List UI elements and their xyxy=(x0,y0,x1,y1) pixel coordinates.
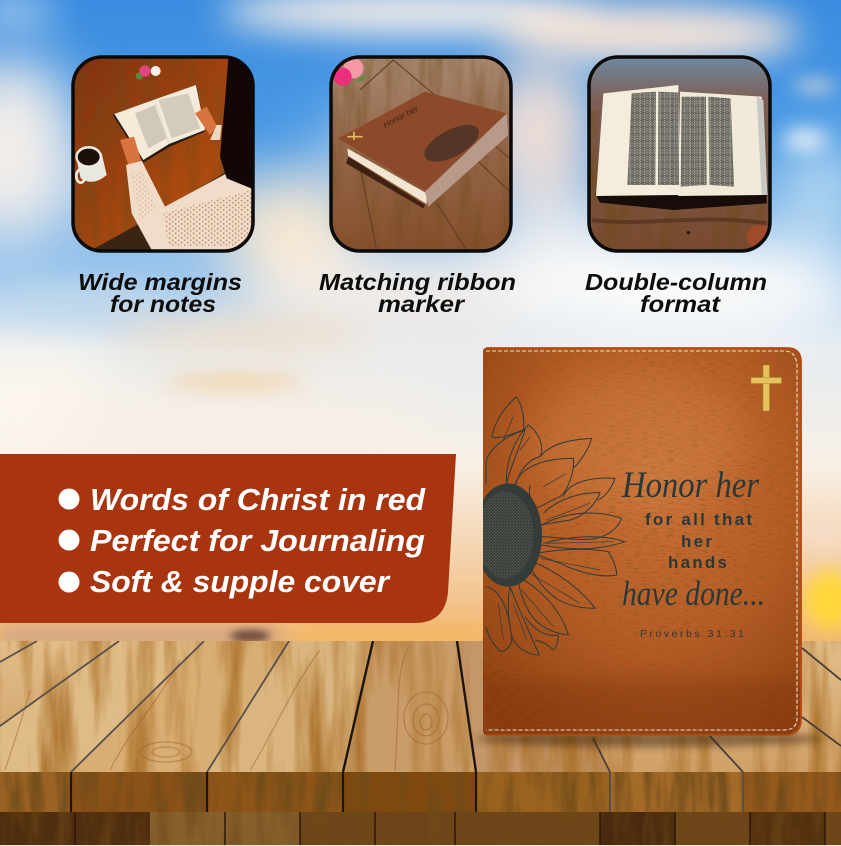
engraved verse: Honor her xyxy=(621,465,760,506)
photo: reading at table xyxy=(73,57,255,251)
icon: gold cross xyxy=(751,365,782,411)
bullet list: Words of Christ in red xyxy=(90,483,426,517)
text columns xyxy=(627,92,734,187)
wooden table xyxy=(0,641,841,845)
engraved verse: for all that xyxy=(645,510,752,529)
hair xyxy=(220,59,252,188)
book xyxy=(338,92,508,208)
engraved verse: hands xyxy=(668,553,727,572)
caption: matching ribbon xyxy=(319,269,516,317)
bullet list xyxy=(58,483,426,599)
sunflower engraving xyxy=(474,397,625,655)
flowers xyxy=(334,58,366,86)
photo: closed book on wood xyxy=(331,57,512,251)
bible cover xyxy=(474,348,801,740)
caption: matching ribbon: marker xyxy=(378,291,465,317)
caption: wide margins: Wide margins xyxy=(78,269,242,295)
caption: matching ribbon: Matching ribbon xyxy=(319,269,516,295)
photo: open double-column bible xyxy=(589,57,773,251)
bullet list: Soft & supple cover xyxy=(90,565,391,599)
engraved verse: Proverbs 31:31 xyxy=(640,628,744,640)
book: Honor her xyxy=(381,103,421,130)
caption: wide margins xyxy=(78,269,242,317)
engraved verse: have done... xyxy=(622,574,765,613)
sky background xyxy=(0,0,841,646)
book shadow on table xyxy=(475,731,825,747)
open book xyxy=(113,85,205,163)
hands xyxy=(120,137,141,165)
bullet list: Perfect for Journaling xyxy=(90,524,425,558)
caption: double-column: format xyxy=(640,291,721,317)
mug xyxy=(75,146,107,183)
caption: double-column: Double-column xyxy=(585,269,767,295)
sweater xyxy=(126,161,253,250)
table edge xyxy=(94,172,226,250)
caption: wide margins: for notes xyxy=(110,291,216,317)
panel: feature list xyxy=(0,454,456,623)
caption: double-column xyxy=(585,269,767,317)
engraved verse xyxy=(621,465,765,640)
flowers xyxy=(136,65,161,80)
engraved verse: her xyxy=(681,532,712,551)
